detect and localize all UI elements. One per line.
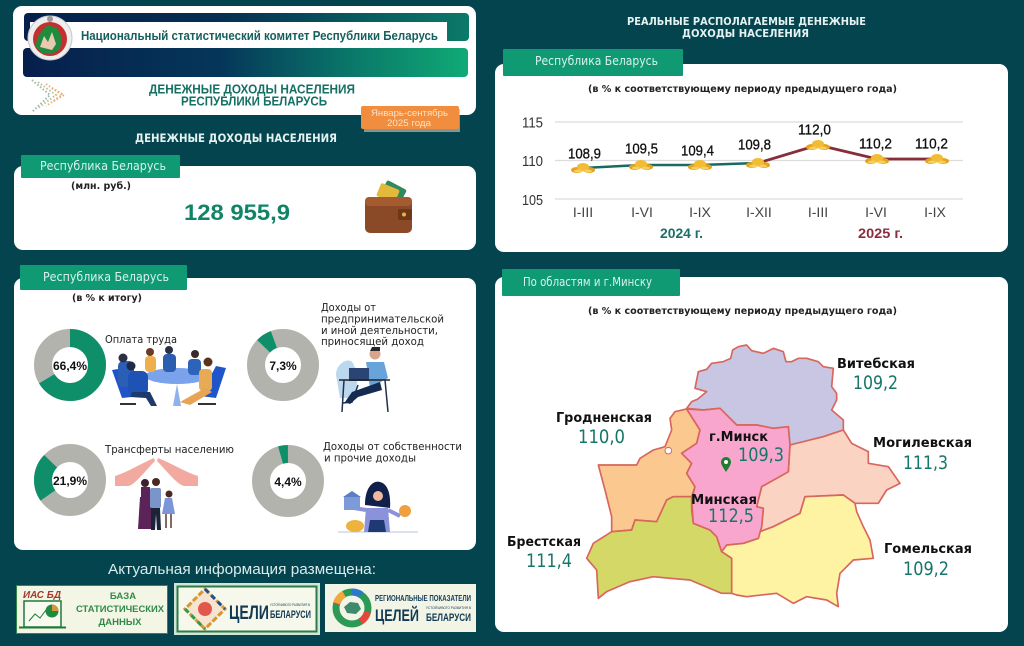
logo: sustainable goals: ЦЕЛИ: [229, 603, 269, 624]
logo: regional indicators: [325, 584, 476, 632]
unit: (в % к итогу): [72, 293, 142, 304]
line chart: 109,8: [738, 136, 771, 154]
region: Grodno: [598, 409, 700, 532]
heading: information links: Актуальная информация размещена:: [108, 561, 376, 578]
label: Gomel: [884, 542, 972, 580]
label: Brest: [507, 535, 581, 572]
logo: sustainable goals: БЕЛАРУСИ: [270, 609, 311, 621]
region: Mogilev: [757, 430, 900, 532]
label: Vitebsk: 109,2: [853, 373, 898, 394]
logo: statistics database: [16, 585, 168, 634]
label: Mogilev: Могилевская: [873, 436, 972, 451]
line chart: [522, 114, 963, 241]
period badge: [361, 106, 460, 132]
line chart: 112,0: [798, 122, 831, 138]
label: Mogilev: [873, 436, 972, 474]
label: Minsk region: [691, 493, 757, 527]
panel: regions map: [495, 269, 1008, 632]
logo: regional indicators: РЕГИОНАЛЬНЫЕ ПОКАЗАТЕЛИ: [375, 593, 471, 603]
label: Grodno: [556, 411, 652, 448]
unit: (млн. руб.): [71, 181, 131, 192]
label: business income: и иной деятельности,: [321, 324, 438, 337]
label: business income: Доходы от: [321, 301, 377, 314]
period badge: Январь-сентябрь: [371, 108, 448, 119]
chart subtitle: (в % к соответствующему периоду предыдущего года): [588, 84, 897, 95]
panel: total income: [14, 155, 476, 250]
line chart: I-III: [573, 204, 593, 220]
line chart: 2025 г.: [858, 225, 903, 241]
donut: business income: [245, 327, 321, 403]
panel: income structure: [14, 265, 476, 550]
logo: regional indicators: ЦЕЛЕЙ: [375, 606, 419, 625]
report title: [149, 82, 355, 108]
donut: property income: [255, 448, 321, 514]
organisation name: Национальный статистический комитет Республики Беларусь: [81, 29, 438, 43]
tab: Республика Беларусь: [40, 158, 166, 173]
line chart: 105: [522, 192, 543, 209]
tab: Республика Беларусь: [535, 53, 658, 68]
total value: 128 955,9: [184, 200, 290, 225]
logo: sustainable goals: [174, 583, 320, 635]
line chart: I-VI: [865, 204, 887, 220]
line chart: 110,2: [915, 136, 948, 152]
tab: [21, 155, 180, 178]
map of Belarus: [587, 345, 900, 607]
illustration: meeting: [112, 346, 226, 406]
line chart: 2024 г.: [660, 225, 703, 241]
tab: По областям и г.Минску: [523, 274, 652, 289]
line chart: I-III: [808, 204, 828, 220]
label: business income: предпринимательской: [321, 312, 444, 326]
line chart: 109,5: [625, 140, 658, 158]
label: property income: и прочие доходы: [324, 452, 416, 464]
line chart: I-XII: [746, 204, 772, 220]
report title: ДЕНЕЖНЫЕ ДОХОДЫ НАСЕЛЕНИЯ: [149, 82, 355, 96]
label: Gomel: 109,2: [903, 559, 949, 580]
illustration: woman with savings: [338, 482, 418, 532]
label: Gomel: Гомельская: [884, 542, 972, 557]
emblem logo: [28, 16, 72, 60]
map subtitle: (в % к соответствующему периоду предыдущего года): [588, 306, 897, 317]
icon: map pin: [721, 457, 731, 472]
chevron decoration: [32, 80, 64, 112]
label: Grodno: 110,0: [578, 427, 625, 448]
label: Vitebsk: [837, 357, 915, 394]
label: Minsk city: [709, 430, 784, 466]
header panel: [13, 6, 476, 132]
heading: real disposable income: ДОХОДЫ НАСЕЛЕНИЯ: [682, 27, 809, 40]
heading: real disposable income: [627, 15, 866, 40]
heading: money income: ДЕНЕЖНЫЕ ДОХОДЫ НАСЕЛЕНИЯ: [135, 131, 337, 145]
label: property income: Доходы от собственности: [323, 440, 462, 453]
donut: transfers: 21,9%: [53, 474, 87, 488]
logo: regional indicators: БЕЛАРУСИ: [426, 612, 471, 624]
logo: statistics database: СТАТИСТИЧЕСКИХ: [76, 604, 165, 615]
line chart: I-VI: [631, 204, 653, 220]
label: Minsk city: 109,3: [738, 445, 784, 466]
logo: regional indicators: УСТОЙЧИВОГО РАЗВИТИЯ В: [426, 606, 472, 610]
donut: property income: 4,4%: [274, 475, 302, 489]
label: Minsk city: г.Минск: [709, 430, 768, 445]
label: business income: приносящей доход: [321, 335, 424, 348]
line chart: 110: [522, 153, 543, 170]
illustration: man at laptop: [336, 347, 390, 412]
tab: [20, 265, 187, 290]
label: transfers: Трансферты населению: [104, 443, 234, 456]
header bars: [23, 13, 469, 77]
line chart: 108,9: [568, 146, 601, 162]
logo: statistics database: БАЗА: [110, 591, 136, 602]
label: Brest: Брестская: [507, 535, 581, 550]
label: Vitebsk: Витебская: [837, 357, 915, 372]
logo: statistics database: ИАС БД: [23, 589, 61, 601]
panel: line chart: [495, 49, 1008, 252]
icon: wallet: [365, 180, 412, 233]
label: Grodno: Гродненская: [556, 411, 652, 426]
label: wages: Оплата труда: [105, 333, 177, 346]
label: property income: [323, 440, 462, 464]
donut: business income: 7,3%: [269, 359, 297, 373]
tab: [503, 49, 683, 76]
heading: real disposable income: РЕАЛЬНЫЕ РАСПОЛАГАЕМЫЕ ДЕНЕЖНЫЕ: [627, 15, 866, 28]
logo: statistics database: ДАННЫХ: [98, 617, 142, 628]
logo: sustainable goals: УСТОЙЧИВОГО РАЗВИТИЯ В: [270, 603, 311, 607]
line chart: 109,4: [681, 142, 714, 160]
label: Minsk region: 112,5: [708, 506, 754, 527]
line chart: I-IX: [924, 204, 947, 220]
label: Minsk region: Минская: [691, 493, 757, 508]
line chart: I-IX: [689, 204, 712, 220]
illustration: family under hands: [115, 458, 198, 530]
line chart: 110,2: [859, 136, 892, 152]
region: Minsk: [682, 408, 790, 552]
label: business income: [321, 301, 444, 348]
region: Brest: [587, 497, 732, 598]
donut: transfers: [32, 442, 108, 518]
region: Gomel: [722, 495, 873, 607]
donut: wages: 66,4%: [53, 359, 87, 373]
label: Brest: 111,4: [526, 551, 572, 572]
line chart: 115: [522, 114, 543, 132]
region: Vitebsk: [687, 345, 843, 445]
tab: [502, 269, 680, 296]
tab: Республика Беларусь: [43, 269, 169, 284]
period badge: 2025 года: [387, 118, 432, 129]
donut: wages: [43, 338, 97, 392]
label: Mogilev: 111,3: [903, 453, 948, 474]
report title: РЕСПУБЛИКИ БЕЛАРУСЬ: [181, 94, 327, 108]
